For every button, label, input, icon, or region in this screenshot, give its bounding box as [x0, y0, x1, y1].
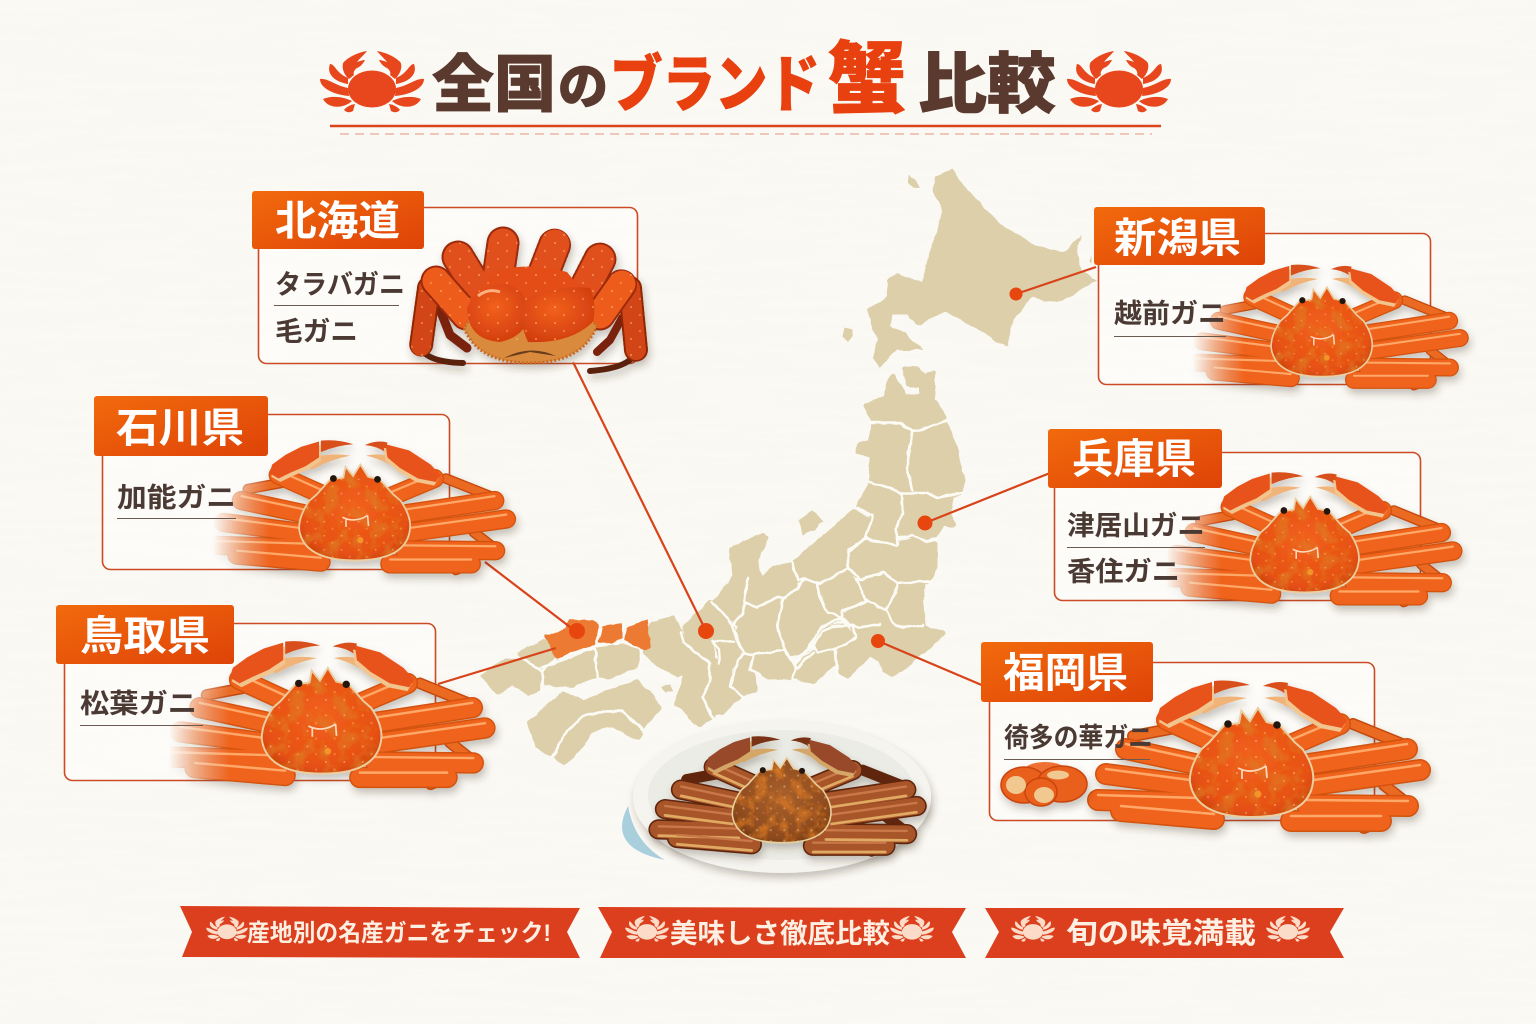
panel frame: [64, 624, 436, 780]
icon: crab left: [625, 916, 669, 942]
panel: Hyogo: [1048, 429, 1453, 602]
banner text: 産地別の名産ガニをチェック!: [247, 920, 551, 947]
photo: king crab: [420, 243, 636, 371]
panel: Fukuoka: [981, 642, 1420, 828]
label: 津居山ガニ: 津居山ガニ: [1067, 511, 1205, 541]
tab: 鳥取県: 鳥取県: [80, 613, 210, 659]
map: Tohoku: [858, 369, 962, 543]
plate with cooked crab: [622, 721, 931, 873]
icon: crab left: [1011, 916, 1055, 942]
banner: origin check: [180, 906, 580, 958]
tab: 兵庫県: [1048, 429, 1222, 488]
label: 松葉ガニ: 松葉ガニ: [80, 689, 197, 719]
panel frame: [990, 662, 1374, 820]
plate: [633, 721, 931, 873]
banner text: 美味しさ徹底比較: [670, 919, 890, 949]
panel: Tottori: [56, 605, 485, 784]
illustration: crab roe pieces: [1001, 762, 1087, 806]
photo: cooked crab: [659, 736, 916, 852]
panel frame: [1054, 452, 1420, 600]
icon: crab right: [1266, 916, 1310, 942]
title text: 蟹: 蟹: [828, 35, 906, 123]
photo: snow crab: [173, 641, 485, 784]
map: prefecture borders: [523, 421, 962, 757]
map marker dots: [569, 288, 1022, 648]
label: crab name: 徛多の華ガニ: [1004, 723, 1153, 753]
panel: Hokkaido: [252, 191, 638, 371]
label: 香住ガニ: 香住ガニ: [1067, 557, 1180, 587]
title text: 比較: 比較: [918, 47, 1056, 121]
tab: 福岡県: 福岡県: [1003, 650, 1128, 696]
title text: の: の: [558, 59, 608, 115]
photo: snow crab: [1098, 680, 1420, 828]
tab: 新潟県: 新潟県: [1114, 215, 1241, 261]
tab: 北海道: [252, 191, 424, 249]
map: Awaji island: [661, 685, 673, 694]
title text: ブランド: ブランド: [610, 50, 820, 120]
banner: seasonal taste: [985, 908, 1344, 958]
tab: 石川県: 石川県: [116, 405, 244, 451]
icon: crab right: [890, 916, 934, 942]
map: Sado island: [799, 510, 823, 535]
title text: 全国: 全国: [432, 51, 556, 120]
tab: 鳥取県: [56, 605, 234, 664]
icon: title crab right: [1067, 51, 1171, 112]
icon: title crab left: [320, 51, 424, 112]
photo: snow crab: [1196, 265, 1460, 386]
photo: snow crab: [1169, 472, 1453, 602]
map: Chugoku tan prefectures: [482, 642, 638, 693]
banner text: 旬の味覚満載: [1066, 917, 1256, 950]
map: Chubu and Kanto: [714, 512, 943, 681]
label: 加能ガニ: 加能ガニ: [117, 483, 236, 513]
label: 毛ガニ: 毛ガニ: [275, 317, 358, 347]
map: highlighted San-in prefectures: [546, 620, 650, 657]
map: Kansai: [644, 603, 756, 725]
banner: taste comparison: [598, 907, 966, 958]
crab shell: [464, 318, 597, 363]
label: タラバガニ: タラバガニ: [275, 270, 405, 300]
map of Japan: [482, 169, 1097, 763]
map: Hokkaido: [867, 169, 1097, 368]
leader lines: [438, 267, 1096, 686]
panel: Ishikawa: [94, 396, 506, 570]
title: [320, 35, 1171, 123]
tab: 石川県: [94, 396, 268, 456]
tab: 福岡県: [981, 642, 1153, 702]
map: Shikoku: [530, 682, 660, 763]
panel frame: [102, 414, 450, 570]
photo: snow crab: [216, 440, 506, 570]
tab: 北海道: 北海道: [275, 198, 400, 244]
map: northern islands: [843, 175, 1092, 341]
icon: blue plate accent: [622, 806, 665, 860]
tab: 新潟県: [1094, 207, 1265, 265]
panel: Niigata: [1094, 207, 1460, 386]
label: 越前ガニ: 越前ガニ: [1114, 299, 1226, 329]
panel frame: [258, 208, 638, 364]
icon: crab: [206, 917, 248, 941]
tab: 兵庫県: 兵庫県: [1072, 436, 1196, 482]
panel frame: [1098, 234, 1430, 384]
